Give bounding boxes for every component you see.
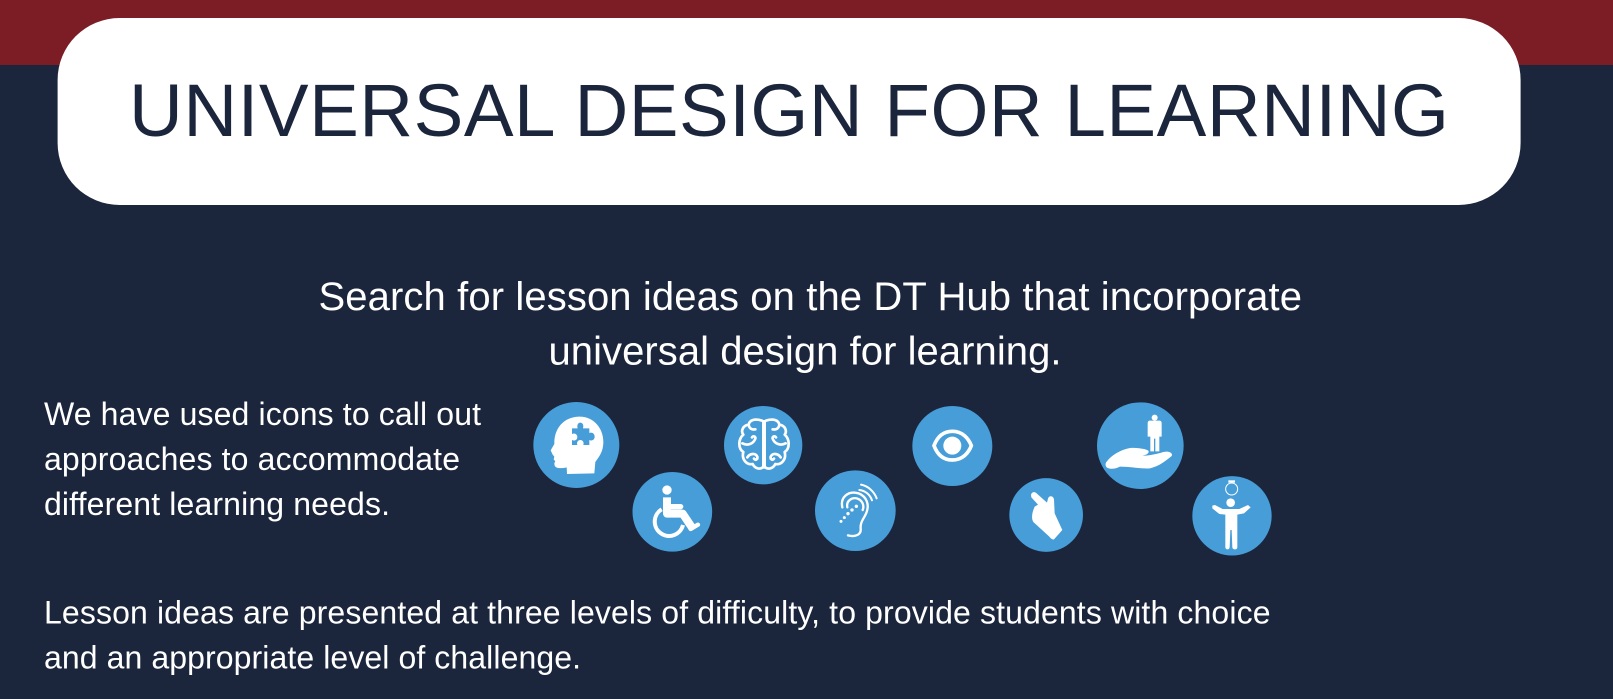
text block: icons explanation: different learning needs. [44, 486, 390, 522]
intro text: universal design for learning. [548, 330, 1062, 374]
text block: difficulty levels [44, 594, 1270, 676]
title card [58, 18, 1521, 205]
intro text: Search for lesson ideas on the DT Hub that incorporate [318, 275, 1302, 319]
icon: eye [912, 406, 992, 486]
intro text [318, 275, 1302, 374]
icon: person on open hand [1097, 402, 1184, 489]
text block: icons explanation: approaches to accommodate [44, 441, 460, 477]
icon: person with stopwatch [1192, 476, 1272, 555]
text block: difficulty levels: Lesson ideas are presented at three levels of difficulty, to provide students with choice [44, 594, 1270, 630]
icon: head with puzzle piece [533, 402, 619, 488]
text block: difficulty levels: and an appropriate level of challenge. [44, 640, 581, 676]
icon: hearing assistance [815, 470, 896, 551]
icon: wheelchair [632, 472, 712, 552]
icon: touch gesture hand [1009, 478, 1083, 552]
icon row [533, 402, 1272, 555]
text block: icons explanation [44, 396, 481, 522]
header band [0, 0, 1613, 65]
text block: icons explanation: We have used icons to call out [44, 396, 481, 432]
title: UNIVERSAL DESIGN FOR LEARNING [129, 69, 1449, 152]
icon: brain [724, 406, 802, 484]
